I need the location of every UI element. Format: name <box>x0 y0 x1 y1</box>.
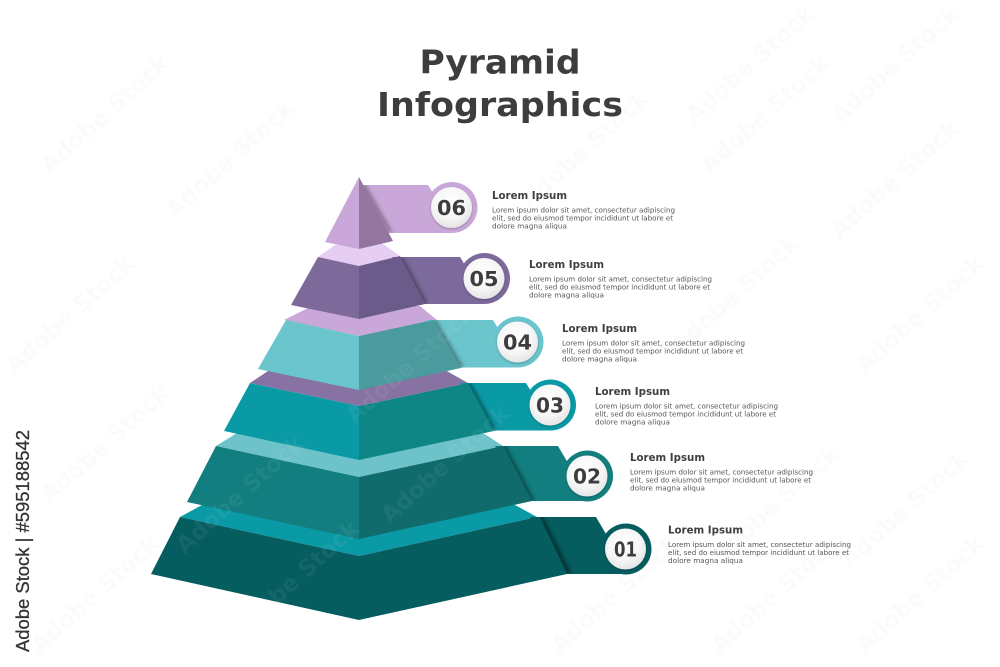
pyramid tier 03 <box>224 370 550 460</box>
label 02 text: elit, sed do eiusmod tempor incididunt ut labore et <box>630 476 811 484</box>
label 01 text: dolore magna aliqua <box>668 557 743 565</box>
label 02 text <box>630 452 813 492</box>
background watermarks: Adobe Stock <box>36 50 175 179</box>
watermarks over pyramid <box>171 300 515 644</box>
label 06 badge <box>426 182 478 233</box>
label 04 text: Lorem Ipsum <box>562 323 637 335</box>
background watermarks: Adobe Stock <box>36 380 175 509</box>
label 03 text <box>595 386 778 426</box>
label 03 text: Lorem Ipsum <box>595 386 670 398</box>
label 05 text: elit, sed do eiusmod tempor incididunt ut labore et <box>529 284 710 292</box>
background watermarks: Adobe Stock <box>851 250 990 379</box>
background watermarks: Adobe Stock <box>851 530 990 659</box>
background watermarks: Adobe Stock <box>666 230 805 359</box>
label 02 text: Lorem Ipsum <box>630 452 705 464</box>
label 02 text: Lorem ipsum dolor sit amet, consectetur adipiscing <box>630 468 813 476</box>
background watermarks: Adobe Stock <box>681 0 820 129</box>
watermarks over pyramid: Adobe Stock <box>171 430 310 559</box>
background watermarks: Adobe Stock <box>1 250 140 379</box>
label 02 badge: 02 <box>573 464 601 488</box>
label 05 text: Lorem Ipsum <box>529 259 604 271</box>
background watermarks: Adobe Stock <box>826 0 965 129</box>
label 05 badge <box>459 253 510 304</box>
pyramid tier 06 <box>325 177 452 249</box>
label 05 badge: 05 <box>470 267 498 291</box>
label 03 text: dolore magna aliqua <box>595 418 670 426</box>
background watermarks: Adobe Stock <box>706 530 845 659</box>
label 05 text <box>529 259 712 300</box>
background watermarks: Adobe Stock <box>826 115 965 244</box>
pyramid tier 02 <box>187 433 587 539</box>
label 05 text: Lorem ipsum dolor sit amet, consectetur adipiscing <box>529 276 712 284</box>
background watermarks: Adobe Stock <box>161 95 300 224</box>
label 01 text: elit, sed do eiusmod tempor incididunt ut labore et <box>668 549 849 557</box>
label 03 text: elit, sed do eiusmod tempor incididunt ut labore et <box>595 410 776 418</box>
background watermarks: Adobe Stock <box>516 85 655 214</box>
watermarks over pyramid: Adobe Stock <box>341 300 480 429</box>
label 04 text: elit, sed do eiusmod tempor incididunt ut labore et <box>562 348 743 356</box>
pyramid tier 04 <box>258 306 518 390</box>
background watermarks: Adobe Stock <box>546 530 685 659</box>
label 06 badge: 06 <box>437 196 466 220</box>
watermarks over pyramid: Adobe Stock <box>226 515 365 644</box>
background watermarks: Adobe Stock <box>706 440 845 569</box>
title: Infographics <box>377 85 623 124</box>
label 04 badge <box>492 316 544 368</box>
label 06 text: elit, sed do eiusmod tempor incididunt ut labore et <box>492 214 673 222</box>
label 04 text: Lorem ipsum dolor sit amet, consectetur adipiscing <box>562 340 745 348</box>
label 06 text: Lorem Ipsum <box>492 190 567 202</box>
label 01 text: Lorem ipsum dolor sit amet, consectetur adipiscing <box>668 541 851 549</box>
label 02 badge <box>562 450 613 502</box>
label 02 text: dolore magna aliqua <box>630 484 705 492</box>
pyramid tier 05 <box>291 244 484 319</box>
watermarks over pyramid: Adobe Stock <box>376 400 515 529</box>
background watermarks: Adobe Stock <box>26 530 165 659</box>
label 01 text <box>668 524 851 565</box>
label 06 text <box>492 190 675 230</box>
label 01 badge: 01 <box>614 538 637 562</box>
stock id side label: Adobe Stock | #595188542 <box>13 430 33 652</box>
label 03 badge: 03 <box>536 394 564 418</box>
background watermarks: Adobe Stock <box>696 50 835 179</box>
label 06 text: Lorem ipsum dolor sit amet, consectetur adipiscing <box>492 206 675 214</box>
pyramid tier 01 <box>151 505 626 620</box>
label 03 text: Lorem ipsum dolor sit amet, consectetur adipiscing <box>595 402 778 410</box>
label 04 badge: 04 <box>503 330 532 354</box>
label 01 text: Lorem Ipsum <box>668 524 743 536</box>
label 04 text: dolore magna aliqua <box>562 356 637 364</box>
background watermarks: Adobe Stock <box>836 445 975 574</box>
label 06 text: dolore magna aliqua <box>492 222 567 230</box>
label 01 badge <box>600 524 652 574</box>
label 04 text <box>562 323 745 364</box>
title <box>377 42 623 124</box>
title: Pyramid <box>420 42 580 82</box>
label 03 badge <box>525 380 576 430</box>
label 05 text: dolore magna aliqua <box>529 292 604 300</box>
